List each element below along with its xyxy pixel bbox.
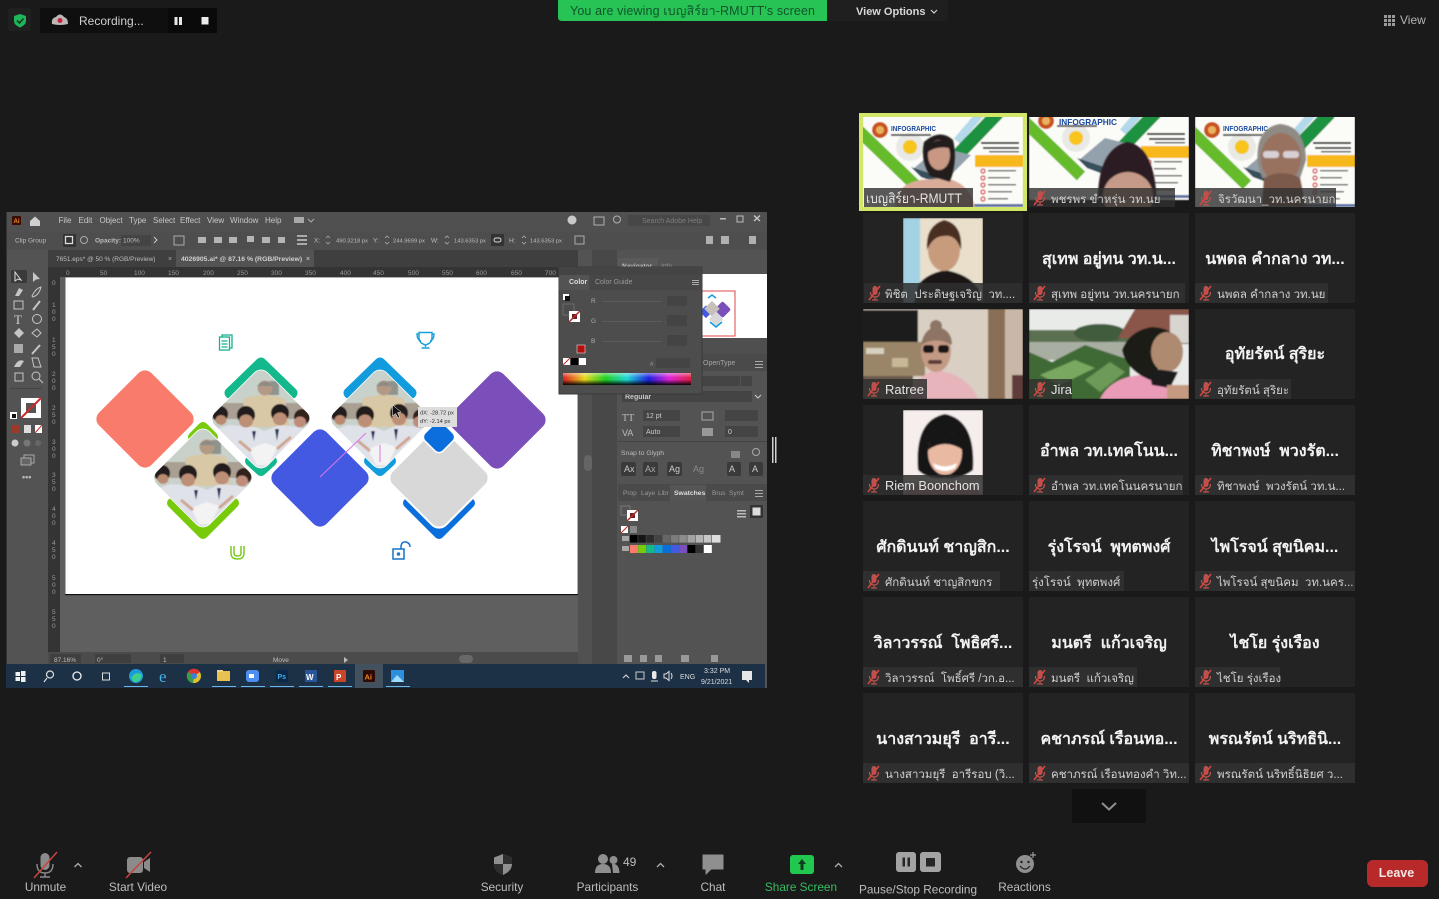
vertical ruler: 0 <box>52 513 56 520</box>
view options button: View Options <box>856 6 925 18</box>
right panels: 12 pt <box>646 413 662 420</box>
gallery row 5: ศักดินนท์: ศักดินนท์ ชาญสิกขกร <box>885 575 992 589</box>
toolbar: share screen <box>765 855 842 894</box>
illustrator menu bar: Search Adobe Help <box>642 218 702 225</box>
gallery: participant จิรวัฒนา <box>1195 117 1355 207</box>
illustrator menu bar <box>6 212 767 232</box>
control bar: 490.3218 px <box>336 238 368 244</box>
right panels: TT <box>622 413 634 424</box>
vertical ruler: 0 <box>52 623 56 630</box>
gallery row 3: อุทัยรัตน์: อุทัยรัตน์ สุริยะ <box>1217 383 1289 397</box>
horizontal ruler: 700 <box>545 270 556 277</box>
vertical ruler: 2 <box>52 371 56 378</box>
gallery row 7: พรณรัตน์: พรณรัตน์ นริทธินิ... <box>1209 729 1341 748</box>
vertical ruler: 3 <box>52 439 56 446</box>
gallery row 3: Ratree <box>863 309 1023 399</box>
control bar <box>6 232 767 250</box>
gallery row 6: ไชโย <box>1195 597 1355 687</box>
gallery row 7: คชาภรณ์ <box>1029 693 1189 783</box>
vertical ruler: 4 <box>52 506 56 513</box>
right panels: Brus <box>712 490 726 497</box>
document tabs <box>48 250 578 267</box>
document tabs: 7651.eps* @ 50 % (RGB/Preview) <box>56 256 155 263</box>
control bar: W: <box>431 238 439 244</box>
windows taskbar: ENG <box>680 674 695 681</box>
measurement tooltip <box>418 407 457 427</box>
toolbar: participants <box>577 854 664 894</box>
floating color panel: # <box>650 361 654 368</box>
gallery row 7: นางสาวมยุรี <box>863 693 1023 783</box>
horizontal ruler: 200 <box>203 270 214 277</box>
gallery: active speaker tile <box>859 105 1027 211</box>
gallery row 7: พรณรัตน์ <box>1195 693 1355 783</box>
blue chevron bottom <box>408 503 470 534</box>
vertical ruler: 0 <box>52 280 56 287</box>
sky chevron bottom <box>369 461 391 471</box>
floating color panel: G <box>591 318 596 325</box>
measurement tooltip: dY: -2.14 px <box>420 419 451 425</box>
horizontal ruler: 350 <box>305 270 316 277</box>
toolbar: participants: Participants <box>577 880 638 894</box>
gallery next page button <box>1072 789 1146 823</box>
right panels <box>618 250 767 664</box>
vertical ruler: 5 <box>52 344 56 351</box>
floating color panel: Color <box>569 279 588 286</box>
gallery row 4: Riem Boonchom: Riem Boonchom <box>885 478 980 493</box>
left tools panel: T <box>14 312 22 327</box>
navigator preview <box>702 274 767 338</box>
vertical ruler: 1 <box>52 337 56 344</box>
screen share banner <box>558 0 827 21</box>
vertical ruler: 5 <box>52 479 56 486</box>
horizontal ruler: 400 <box>340 270 351 277</box>
gallery row 4: ทิชาพงษ์: ทิชาพงษ์ พวงรัตน์ วท.น... <box>1217 479 1345 493</box>
right panels: Prop <box>623 490 637 497</box>
gallery row 6: มนตรี <box>1029 597 1189 687</box>
toolbar: unmute <box>25 852 82 894</box>
vertical ruler: 4 <box>52 540 56 547</box>
gallery: participant จิรวัฒนา: จิรวัฒนา_วท.นครนายก <box>1218 193 1335 206</box>
toolbar: pause / stop recording <box>859 852 977 896</box>
status bar: 0° <box>97 656 104 664</box>
right panels: 0 <box>728 429 732 436</box>
horizontal ruler: 500 <box>408 270 419 277</box>
vertical ruler: 0 <box>52 589 56 596</box>
horizontal ruler: 450 <box>373 270 384 277</box>
gallery row 2: นพดล: นพดล คำกลาง วท.นย <box>1217 288 1325 301</box>
windows taskbar: W <box>306 673 314 682</box>
right panels: Swatches <box>674 490 706 497</box>
measurement tooltip: dX: -28.72 px <box>420 410 454 416</box>
control bar: X: <box>314 238 320 244</box>
vertical ruler: 0 <box>52 554 56 561</box>
gallery row 2: สุเทพ: สุเทพ อยู่ทน วท.นครนายก <box>1051 289 1180 301</box>
horizontal ruler: 600 <box>476 270 487 277</box>
toolbar: unmute: Unmute <box>25 880 67 894</box>
gallery row 4: อำพล: อำพล วท.เทคโนนครนายก <box>1051 479 1182 493</box>
vertical ruler: 0 <box>52 309 56 316</box>
vertical ruler: 5 <box>52 412 56 419</box>
floating color panel: R <box>591 298 596 305</box>
vertical ruler: 5 <box>52 616 56 623</box>
gallery: participant พชรพร: พชรพร ขำหรุ่น วท.นย <box>1051 193 1160 206</box>
vertical ruler: 5 <box>52 575 56 582</box>
right panels: Regular <box>625 394 651 401</box>
control bar: Clip Group <box>15 238 46 244</box>
gallery row 5: รุ่งโรจน์: รุ่งโรจน์ พุทตพงศ์ <box>1032 575 1121 589</box>
recording indicator: Recording... <box>79 14 144 28</box>
vertical ruler: 0 <box>52 351 56 358</box>
gallery row 2: พิชิต: พิชิต ประดิษฐเจริญ วท.... <box>885 288 1015 301</box>
gallery row 7: นางสาวมยุรี: นางสาวมยุรี อารีรอบ (วิ... <box>885 768 1015 781</box>
gallery row 5: ไพโรจน์: ไพโรจน์ สุขนิคม... <box>1210 536 1338 557</box>
floating color panel: Color Guide <box>595 279 632 286</box>
illustrator menu bar: Type <box>129 216 147 225</box>
shared screen: Adobe Illustrator window <box>6 212 767 688</box>
gallery row 2: นพดล <box>1195 213 1355 303</box>
gallery row 4: อำพล: อำพล วท.เทคโนน... <box>1040 440 1178 460</box>
gallery row 3: Jira: Jira <box>1051 382 1073 397</box>
horizontal ruler: 250 <box>237 270 248 277</box>
horizontal ruler: 50 <box>100 270 108 277</box>
gallery row 4: Riem Boonchom <box>863 405 1023 495</box>
toolbar: chat: Chat <box>701 880 726 894</box>
vertical ruler: 5 <box>52 609 56 616</box>
illustrator menu bar: Object <box>100 216 123 225</box>
purple diamond <box>445 368 549 472</box>
view layout button: View <box>1400 13 1426 27</box>
windows taskbar <box>6 664 765 688</box>
drag guide lines <box>320 433 380 477</box>
vertical ruler: 0 <box>52 453 56 460</box>
floating color panel: B <box>591 338 595 345</box>
view options button <box>827 0 948 21</box>
floating color panel <box>559 267 702 394</box>
right panels: VA <box>622 428 633 438</box>
control bar: 143.6353 px <box>454 238 486 244</box>
status bar <box>48 652 578 664</box>
right panels: OpenType <box>703 360 735 367</box>
vertical ruler: 0 <box>52 486 56 493</box>
right panels: Symt <box>729 490 744 497</box>
mouse cursor <box>392 405 401 418</box>
gallery row 6: วิลาวรรณ์ <box>863 597 1023 687</box>
icon: trophy <box>417 332 434 348</box>
toolbar: leave button: Leave <box>1379 866 1414 880</box>
gallery row 7: คชาภรณ์: คชาภรณ์ เรือนทองคำ วิท... <box>1051 767 1187 781</box>
gallery row 5: ศักดินนท์ <box>863 501 1023 591</box>
vertical scrollbar <box>578 250 617 664</box>
control bar: 244.9699 px <box>393 238 425 244</box>
glyph snap buttons: Ax <box>624 464 635 474</box>
toolbar: pause / stop recording: Pause/Stop Recording <box>859 882 977 896</box>
status bar: 1 <box>163 657 167 664</box>
gallery row 6: มนตรี: มนตรี แก้วเจริญ <box>1051 672 1134 685</box>
icon: magnet <box>231 546 244 559</box>
toolbar: security <box>481 854 523 894</box>
toolbar: chat <box>701 855 726 894</box>
illustrator menu bar: Help <box>265 216 282 225</box>
glyph snap buttons: Ag <box>669 464 680 474</box>
glyph snap buttons: A <box>729 464 735 474</box>
document tabs: × <box>306 256 310 263</box>
gallery row 3: Jira <box>1029 309 1189 399</box>
illustrator menu bar: Edit <box>78 216 93 225</box>
right panels: Laye <box>641 490 655 497</box>
photo diamond two <box>328 367 432 471</box>
view layout button <box>1384 13 1426 27</box>
gallery row 6: วิลาวรรณ์: วิลาวรรณ์ โพธิศรี... <box>873 632 1012 652</box>
vertical ruler: 3 <box>52 472 56 479</box>
vertical ruler: 0 <box>52 419 56 426</box>
illustrator menu bar: Effect <box>180 216 201 225</box>
vertical ruler: 0 <box>52 316 56 323</box>
gallery: active speaker tile: เบญสิร์ยา-RMUTT <box>866 190 962 206</box>
vertical ruler: 0 <box>52 378 56 385</box>
swatches <box>621 505 763 662</box>
salmon diamond <box>93 367 197 471</box>
gallery row 6: ไชโย: ไชโย รุ่งเรือง <box>1228 632 1320 653</box>
gallery row 7: นางสาวมยุรี: นางสาวมยุรี อารี... <box>876 729 1010 749</box>
gallery row 2: พิชิต <box>863 213 1023 303</box>
speaker figure <box>895 134 975 207</box>
control bar: 143.6353 px <box>530 238 562 244</box>
toolbar: security: Security <box>481 880 523 894</box>
sky chevron top <box>349 363 411 393</box>
toolbar: start video <box>109 852 168 894</box>
horizontal ruler: 550 <box>442 270 453 277</box>
small blue diamond <box>422 420 456 454</box>
left tools panel: ••• <box>22 472 31 482</box>
gallery row 2: นพดล: นพดล คำกลาง วท... <box>1205 250 1345 268</box>
gallery row 4: อำพล <box>1029 405 1189 495</box>
gallery: participant พชรพร: INFOGRAPHIC <box>1059 117 1117 127</box>
toolbar: start video: Start Video <box>109 880 168 894</box>
pasteboard <box>60 277 578 652</box>
photo diamond three <box>151 426 255 530</box>
gallery row 3: อุทัยรัตน์: อุทัยรัตน์ สุริยะ <box>1225 344 1325 364</box>
status bar: Move <box>273 657 289 664</box>
horizontal ruler: 100 <box>134 270 145 277</box>
teal chevron top <box>230 363 292 393</box>
gallery row 3: อุทัยรัตน์ <box>1195 309 1355 399</box>
glyph snap buttons <box>621 462 763 476</box>
illustrator menu bar: File <box>58 216 72 225</box>
windows taskbar: P <box>336 673 342 682</box>
right panels: Libr <box>658 490 670 497</box>
control bar: H: <box>509 238 516 244</box>
gallery row 5: รุ่งโรจน์ <box>1029 501 1189 591</box>
status bar: 87.16% <box>54 657 76 664</box>
illustrator menu bar: Ai <box>14 219 20 225</box>
glyph snap buttons: A <box>752 464 758 474</box>
recording indicator <box>40 8 217 33</box>
horizontal ruler: 650 <box>511 270 522 277</box>
illustrator menu bar: Select <box>153 216 176 225</box>
control bar: Opacity: <box>95 238 121 244</box>
top bar: security shield <box>8 8 31 31</box>
glyph snap buttons: Ax <box>645 464 656 474</box>
toolbar: participants: 49 <box>623 855 637 869</box>
right panels: Info <box>661 263 672 270</box>
illustrator menu bar: View <box>207 216 224 225</box>
gallery row 5: ไพโรจน์ <box>1195 501 1355 591</box>
toolbar: leave button <box>1367 860 1428 887</box>
document tabs: × <box>168 256 172 263</box>
gallery row 7: คชาภรณ์: คชาภรณ์ เรือนทอ... <box>1040 729 1178 748</box>
share splitter handle <box>772 437 776 463</box>
windows taskbar: 3:32 PM <box>704 668 730 675</box>
vertical ruler: 0 <box>52 385 56 392</box>
gallery row 6: มนตรี: มนตรี แก้วเจริญ <box>1051 633 1167 653</box>
vertical ruler: 2 <box>52 405 56 412</box>
horizontal ruler: 150 <box>168 270 179 277</box>
gallery row 2: สุเทพ <box>1029 213 1189 303</box>
gallery: participant จิรวัฒนา: INFOGRAPHIC <box>1223 126 1268 133</box>
artboard with infographic draft <box>65 278 578 595</box>
document tabs: 4026905.ai* @ 87.16 % (RGB/Preview) <box>181 256 302 263</box>
green chevron bottom <box>172 503 234 534</box>
gallery row 6: ไชโย: ไชโย รุ่งเรือง <box>1216 671 1281 685</box>
gallery row 3: Ratree: Ratree <box>885 382 924 397</box>
toolbar: reactions: Reactions <box>998 880 1051 894</box>
illustrator menu bar: Window <box>230 216 259 225</box>
gallery row 5: รุ่งโรจน์: รุ่งโรจน์ พุทตพงศ์ <box>1048 536 1171 557</box>
glyph snap buttons: Ag <box>693 464 704 474</box>
green chevron top <box>193 427 213 437</box>
vertical ruler: 5 <box>52 547 56 554</box>
gallery: active speaker tile: INFOGRAPHIC <box>891 126 936 133</box>
gallery row 5: ไพโรจน์: ไพโรจน์ สุขนิคม วท.นคร... <box>1216 575 1353 589</box>
vertical ruler: 0 <box>52 446 56 453</box>
photo diamond one <box>209 367 313 471</box>
vertical ruler: 0 <box>52 520 56 527</box>
windows taskbar: 9/21/2021 <box>701 679 732 686</box>
gallery row 6: วิลาวรรณ์: วิลาวรรณ์ โพธิ์ศรี /วก.อ... <box>884 669 1015 685</box>
control bar: Y: <box>373 238 379 244</box>
gray diamond <box>387 426 491 530</box>
icon: open lock <box>393 542 410 559</box>
left tools panel <box>6 212 48 664</box>
right panels: Navigator <box>622 263 652 270</box>
gallery row 5: ศักดินนท์: ศักดินนท์ ชาญสิก... <box>876 537 1010 557</box>
toolbar: reactions <box>998 852 1051 894</box>
indigo diamond <box>268 426 372 530</box>
vertical ruler: 0 <box>52 582 56 589</box>
windows taskbar: e <box>159 667 167 686</box>
horizontal ruler: 0 <box>66 270 70 277</box>
teal chevron bottom <box>250 461 272 471</box>
windows taskbar: Ps <box>278 674 286 681</box>
right panels: Snap to Glyph <box>621 450 664 457</box>
windows taskbar: Ai <box>364 672 372 682</box>
control bar: 100% <box>123 238 140 244</box>
gallery row 7: พรณรัตน์: พรณรัตน์ นริทธิ์นิธิยศ ว... <box>1217 765 1343 781</box>
gallery row 4: ทิชาพงษ์: ทิชาพงษ์ พวงรัต... <box>1211 441 1339 460</box>
icon: document <box>220 335 232 350</box>
horizontal ruler: 300 <box>271 270 282 277</box>
toolbar: share screen: Share Screen <box>765 880 837 894</box>
horizontal ruler <box>48 267 578 277</box>
gallery: participant พชรพร <box>1029 117 1189 207</box>
vertical ruler: 1 <box>52 302 56 309</box>
vertical ruler <box>48 267 60 652</box>
screen share banner: You are viewing เบญสิร์ยา-RMUTT's screen <box>570 4 815 18</box>
right panels: Auto <box>646 429 661 436</box>
gallery row 2: สุเทพ: สุเทพ อยู่ทน วท.น... <box>1042 251 1176 270</box>
gallery row 4: ทิชาพงษ์ <box>1195 405 1355 495</box>
